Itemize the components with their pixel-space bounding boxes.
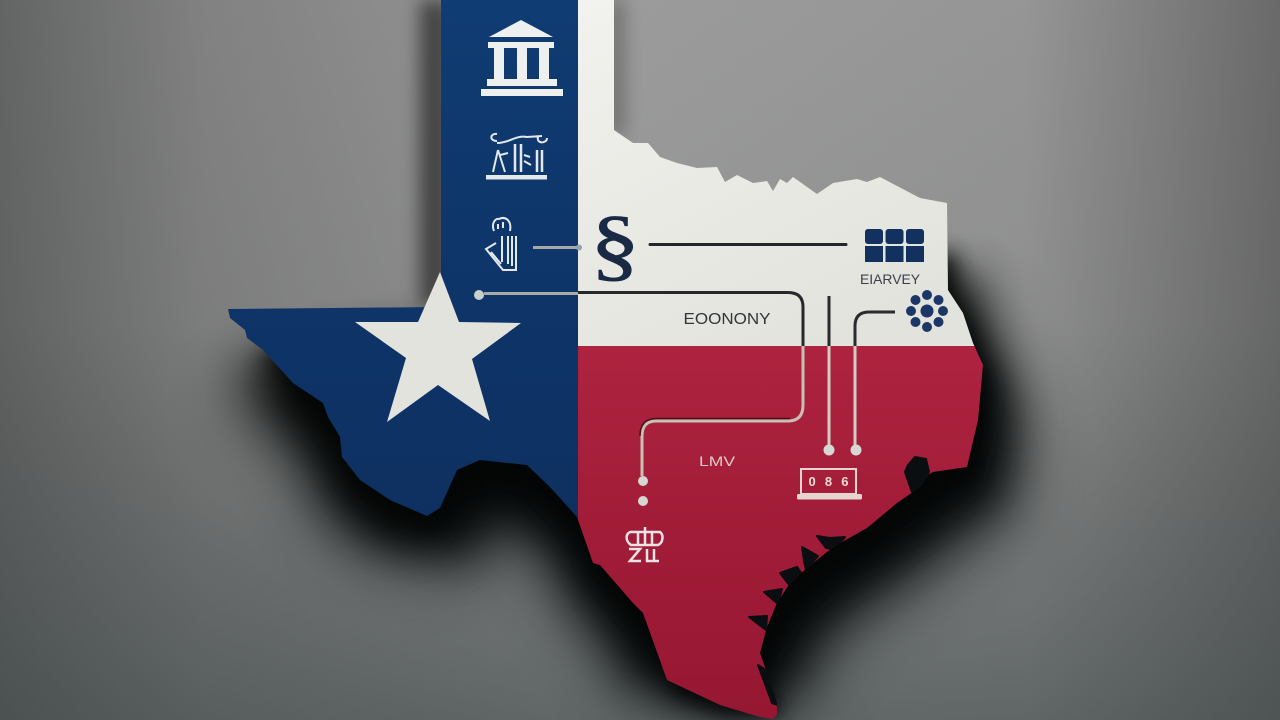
icon: section sign: § [590, 199, 640, 289]
icon: raised hand [486, 218, 516, 270]
connector end dots [638, 444, 862, 506]
coastal bays [749, 457, 929, 705]
icon: courthouse scroll [486, 134, 547, 180]
white field [578, 0, 998, 346]
blue field [228, 0, 578, 521]
icon: energy flower [906, 290, 948, 332]
star [355, 272, 521, 422]
icon: grid [865, 229, 924, 262]
label: energy: EIARVEY [860, 271, 921, 287]
connector: hand to section sign [533, 244, 582, 250]
label: economy: EOONONY [684, 311, 771, 328]
icon: laptop counter: 0 8 6 [808, 474, 848, 489]
icon: building crest [627, 527, 662, 561]
icon: capitol building [481, 20, 563, 96]
icon: laptop counter [797, 469, 862, 500]
connector: economy line [474, 290, 803, 476]
connector: section sign to grid [650, 243, 846, 246]
connector: middle line [828, 296, 830, 446]
map shadow [222, 0, 1023, 717]
connector: energy line [855, 312, 895, 446]
red field [578, 346, 998, 720]
Texas map with flag colours [220, 0, 998, 720]
label: law: LMV [699, 453, 736, 469]
